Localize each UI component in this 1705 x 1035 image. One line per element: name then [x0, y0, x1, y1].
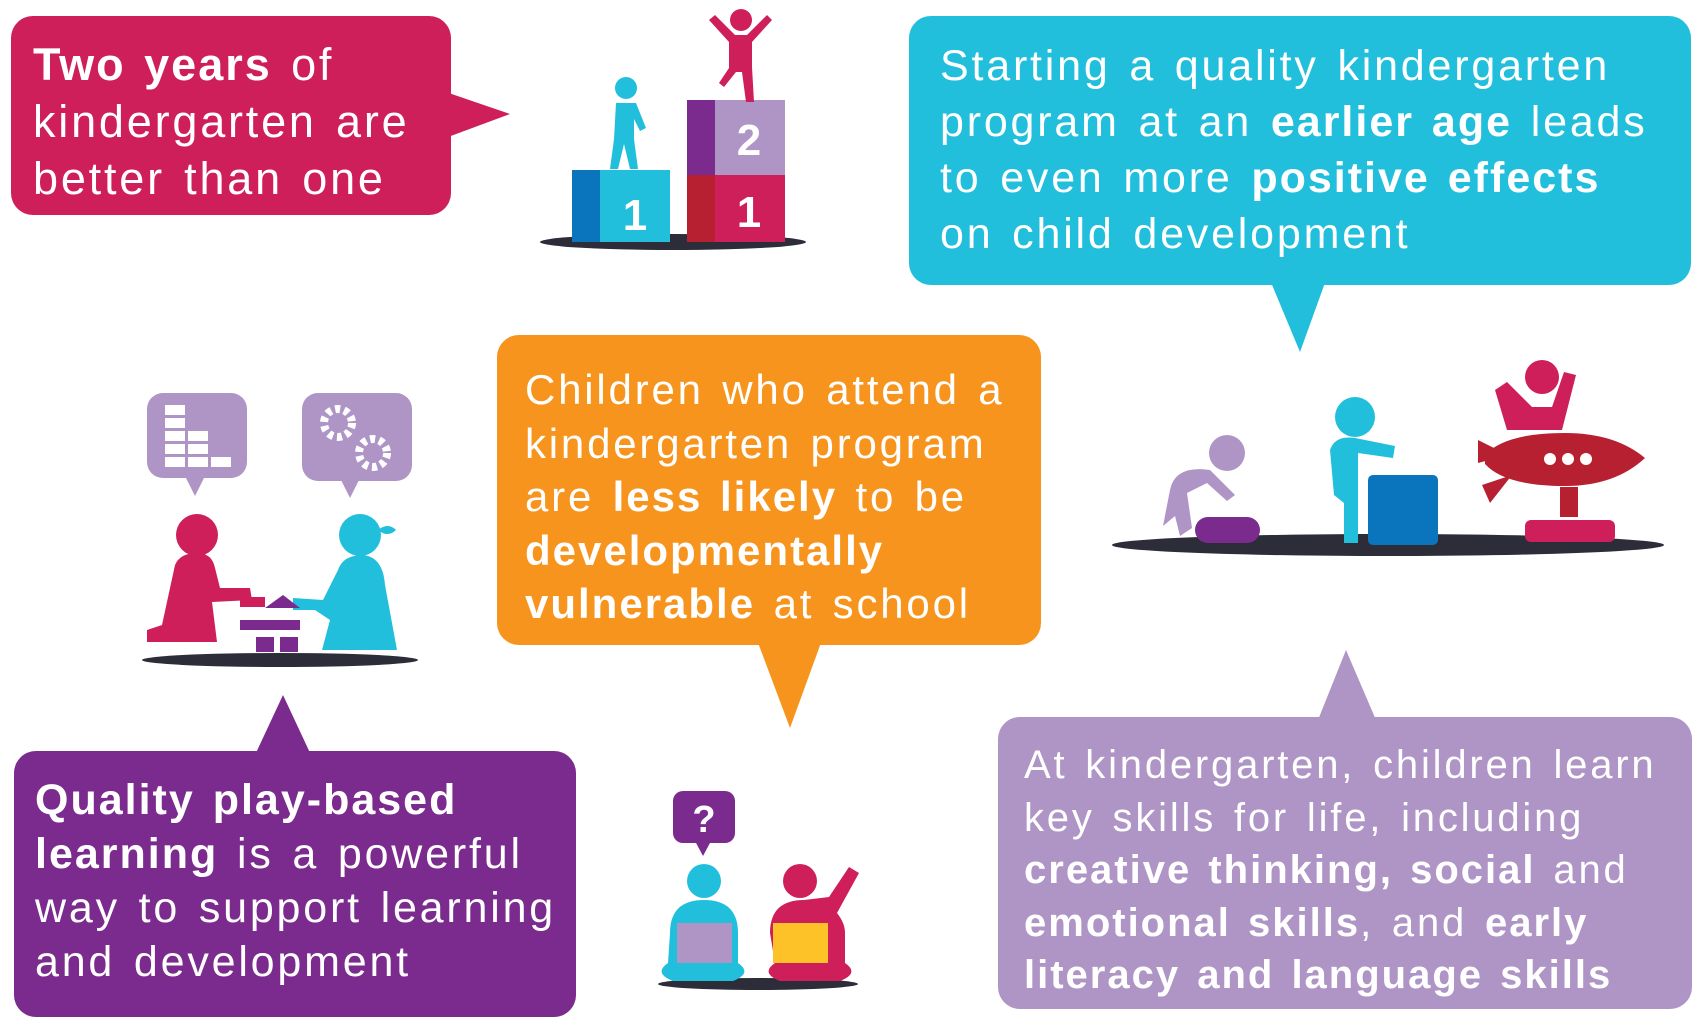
panel: two years: Two years of [33, 39, 334, 90]
panel: earlier age [909, 16, 1691, 285]
panel: key skills [998, 717, 1692, 1009]
panel: less likely vulnerable: are less likely to be [525, 473, 967, 520]
panel: two years: better than one [33, 153, 386, 204]
arrow: orange tail [758, 645, 820, 728]
icon: reading children [658, 791, 859, 990]
panel: key skills: key skills for life, including [1024, 796, 1584, 840]
panel: play-based learning [14, 751, 576, 1017]
panel: less likely vulnerable: Children who attend a [525, 366, 1004, 413]
panel: key skills: At kindergarten, children learn [1024, 743, 1656, 787]
icon: playground [1112, 360, 1664, 556]
panel: earlier age: Starting a quality kindergarten [940, 42, 1610, 90]
panel: less likely vulnerable: kindergarten program [525, 420, 987, 466]
panel: less likely vulnerable: vulnerable at school [525, 580, 971, 627]
icon: reading children: ? [692, 799, 716, 841]
panel: play-based learning: learning is a powerful [35, 830, 523, 878]
panel: key skills: creative thinking, social and [1024, 848, 1629, 892]
arrow: purple tail [256, 695, 310, 751]
icon: podium: 2 [737, 116, 761, 165]
panel: earlier age: program at an earlier age leads [940, 98, 1648, 146]
panel: play-based learning: and development [35, 938, 411, 986]
panel: earlier age: on child development [940, 210, 1410, 258]
panel: two years: kindergarten are [33, 96, 410, 147]
icon: podium [540, 9, 806, 250]
arrow: red tail [451, 94, 510, 136]
panel: less likely vulnerable [497, 335, 1041, 645]
panel: key skills: literacy and language skills [1024, 953, 1612, 997]
panel: earlier age: to even more positive effects [940, 154, 1600, 202]
arrow: lavender tail [1319, 650, 1375, 717]
panel: play-based learning: Quality play-based [35, 776, 457, 824]
panel: two years [11, 16, 451, 215]
arrow: cyan tail [1272, 285, 1324, 352]
panel: play-based learning: way to support learning [35, 884, 556, 932]
icon: children playing blocks [142, 393, 418, 667]
panel: less likely vulnerable: developmentally [525, 526, 884, 574]
icon: podium: 1 [623, 191, 647, 240]
panel: key skills: emotional skills, and early [1024, 900, 1588, 944]
icon: podium: 1 [737, 188, 761, 237]
